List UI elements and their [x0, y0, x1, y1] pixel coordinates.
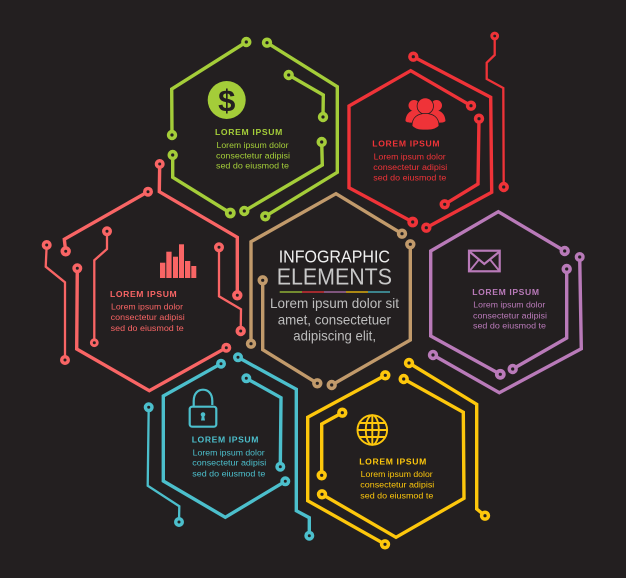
icon: envelope — [469, 251, 500, 271]
circuit nodes: tan — [246, 229, 415, 390]
text block: central description: Lorem ipsum dolor sit — [270, 295, 399, 311]
heading: yellow: LOREM IPSUM — [359, 456, 426, 466]
panel: central tan title hexagon — [246, 194, 415, 390]
panel: coral chart hexagon — [42, 159, 245, 391]
text block: coral: Lorem ipsum dolor — [111, 302, 183, 312]
heading: red: LOREM IPSUM — [372, 139, 440, 149]
text block: red: consectetur adipisi — [373, 162, 447, 172]
text block: yellow: consectetur adipisi — [360, 479, 434, 489]
text block: central description — [270, 295, 399, 344]
text block: red: sed do eiusmod te — [373, 173, 447, 183]
circuit nodes: cyan — [144, 353, 314, 540]
text block: cyan: sed do eiusmod te — [192, 468, 266, 478]
icon: dollar coin — [208, 81, 246, 119]
text block: coral — [111, 302, 185, 333]
text block: purple: Lorem ipsum dolor — [473, 300, 545, 310]
text block: yellow: sed do eiusmod te — [360, 490, 434, 500]
title — [277, 247, 392, 289]
text block: coral: consectetur adipisi — [111, 312, 185, 322]
text block: cyan: consectetur adipisi — [192, 458, 266, 468]
icon: globe — [358, 415, 387, 445]
circuit nodes: yellow — [317, 358, 490, 549]
circuit lines: red — [349, 36, 504, 228]
text block: cyan — [192, 447, 266, 478]
text block: green: consectetur adipisi — [216, 150, 290, 160]
text block: yellow — [360, 469, 434, 500]
text block: purple — [473, 300, 547, 331]
text block: purple: sed do eiusmod te — [473, 321, 546, 331]
panel: purple mail hexagon — [428, 212, 584, 393]
circuit nodes: purple — [428, 246, 584, 379]
text block: green: sed do eiusmod te — [216, 161, 289, 171]
title: ELEMENTS — [277, 263, 392, 289]
icon: people group — [406, 98, 446, 130]
heading: green: LOREM IPSUM — [215, 127, 282, 137]
text block: central description: adipiscing elit, — [293, 328, 376, 344]
circuit nodes: green — [167, 37, 328, 221]
heading: cyan: LOREM IPSUM — [192, 435, 258, 445]
circuit nodes: red — [408, 32, 509, 232]
title: INFOGRAPHIC — [279, 247, 390, 267]
circuit lines: cyan — [148, 357, 309, 536]
circuit lines: yellow — [308, 363, 485, 544]
heading: coral: LOREM IPSUM — [110, 289, 177, 299]
text block: cyan: Lorem ipsum dolor — [193, 447, 265, 457]
icon: bar chart — [160, 244, 196, 278]
circuit lines: green — [172, 42, 337, 216]
text block: purple: consectetur adipisi — [473, 310, 547, 320]
circuit lines: coral — [46, 164, 241, 391]
text block: yellow: Lorem ipsum dolor — [361, 469, 433, 479]
circuit nodes: coral — [42, 159, 245, 365]
text block: green: Lorem ipsum dolor — [216, 140, 289, 150]
icon: padlock — [190, 390, 216, 427]
text block: red: Lorem ipsum dolor — [374, 152, 446, 162]
heading: purple: LOREM IPSUM — [472, 287, 539, 297]
rainbow divider — [280, 291, 390, 293]
panel: green finance hexagon — [167, 37, 337, 221]
text block: central description: amet, consectetuer — [278, 312, 391, 328]
text block: red — [373, 152, 447, 183]
circuit lines: purple — [431, 212, 581, 393]
icon: dollar coin: $ — [218, 83, 235, 118]
panel: red team hexagon — [349, 32, 509, 232]
text block: green — [216, 140, 290, 171]
circuit lines: tan — [251, 194, 410, 385]
panel: cyan security hexagon — [144, 353, 314, 540]
text block: coral: sed do eiusmod te — [111, 323, 184, 333]
panel: yellow globe hexagon — [308, 358, 490, 549]
